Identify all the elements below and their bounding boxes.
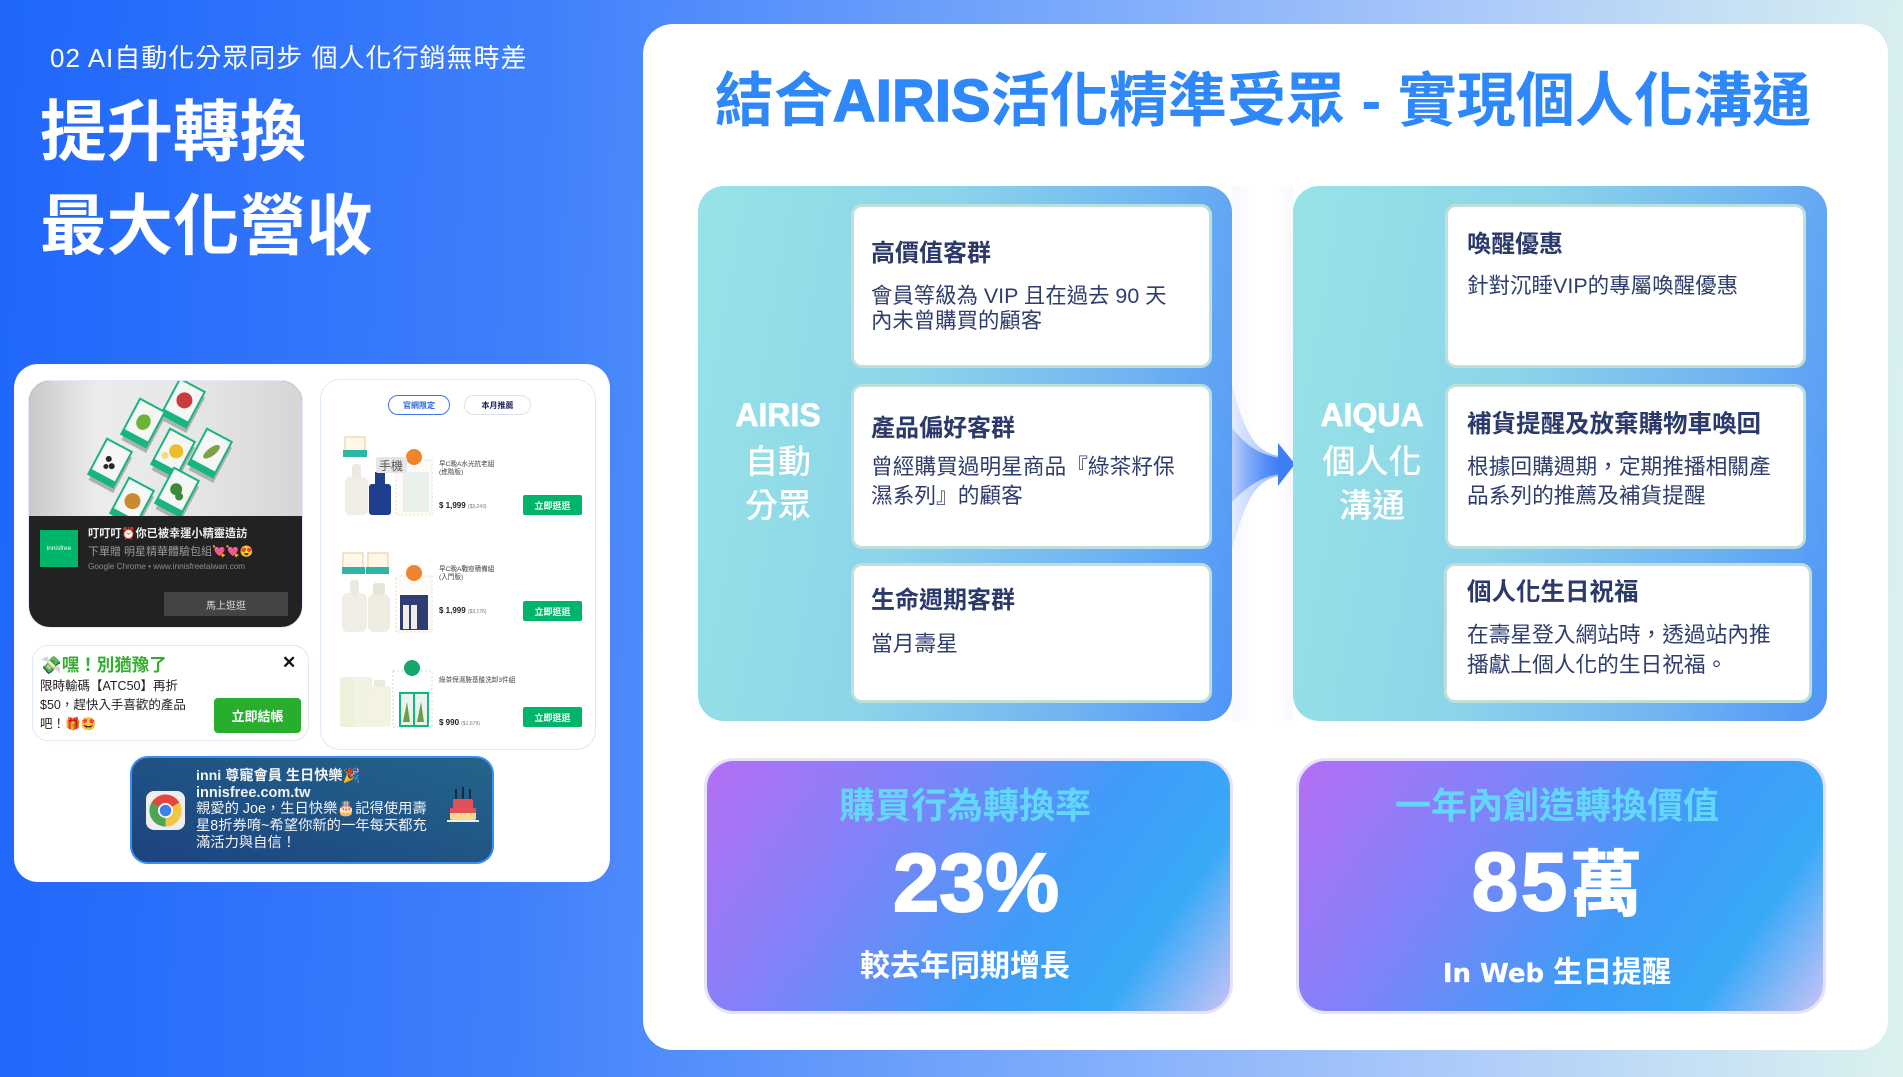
popup text: 限時輸碼【ATC50】再折 — [40, 679, 178, 693]
product 1 button — [523, 495, 582, 515]
product 2 button: 立即逛逛 — [534, 606, 570, 616]
text: 個人化生日祝福 — [1467, 622, 1771, 677]
text: 產品偏好客群 — [871, 454, 1175, 508]
text: 當月壽星: 當月壽星 — [871, 631, 958, 656]
panel: main content — [643, 24, 1888, 1050]
product 1 text: (進階版) — [439, 469, 463, 476]
AIQUA label: AIQUA — [1320, 397, 1424, 433]
product 2 text: 早C晚A戰痘積備組 — [439, 566, 494, 573]
heading: 生命週期客群: 生命週期客群 — [871, 587, 1015, 614]
notification title: inni 尊寵會員 生日快樂🎉 — [196, 768, 360, 784]
tab: 官網限定: 官網限定 — [403, 400, 435, 410]
text: 個人化生日祝福: 播獻上個人化的生日祝福。 — [1467, 652, 1727, 677]
text: 個人化生日祝福: 在壽星登入網站時，透過站內推 — [1467, 622, 1771, 647]
notification text: 星8折券唷~希望你新的一年每天都充 — [196, 818, 427, 834]
checkout button — [214, 698, 301, 733]
product 3 price: $ 990 ($1,679) — [439, 718, 480, 727]
heading: 產品偏好客群: 產品偏好客群 — [871, 415, 1015, 442]
分眾 label: 分眾 — [745, 487, 811, 524]
stat value: 23%: 23% — [893, 836, 1059, 929]
notification domain: innisfree.com.tw — [196, 785, 310, 801]
panel: AIRIS segmentation — [698, 186, 1232, 721]
text: 高價值客群: 內未曾購買的顧客 — [871, 309, 1042, 333]
birthday notification — [130, 756, 494, 864]
push source: Google Chrome • www.innisfreetaiwan.com — [88, 562, 245, 571]
product recommendation card — [320, 379, 596, 750]
subtitle: 02 AI自動化分眾同步 個人化行銷無時差 — [50, 43, 528, 73]
popup text — [40, 679, 186, 731]
product image 2 — [342, 552, 432, 632]
heading: 個人化生日祝福: 個人化生日祝福 — [1467, 579, 1638, 606]
product 1 text: 早C晚A水光抗老組 — [439, 461, 494, 468]
innisfree logo — [40, 530, 78, 567]
heading: 喚醒優惠: 喚醒優惠 — [1467, 231, 1563, 258]
notification text: 親愛的 Joe，生日快樂🎂記得使用壽 — [196, 801, 427, 817]
product 1 text — [439, 460, 494, 476]
push button: 馬上逛逛 — [206, 600, 246, 612]
card: 產品偏好客群 — [851, 384, 1212, 549]
stat value: 85萬: 85萬 — [1472, 835, 1642, 928]
in-web popup card — [32, 645, 309, 741]
text: 補貨提醒: 品系列的推薦及補貨提醒 — [1467, 483, 1706, 508]
panel: notification examples — [14, 364, 610, 882]
text: 高價值客群 — [871, 284, 1167, 333]
text: 產品偏好客群: 濕系列』的顧客 — [871, 483, 1023, 508]
product 2 text — [439, 565, 494, 581]
個人化 label: 個人化 — [1322, 443, 1422, 480]
tab: 本月推薦 — [464, 395, 531, 415]
card: 喚醒優惠 — [1445, 204, 1806, 368]
text: 喚醒優惠: 針對沉睡VIP的專屬喚醒優惠 — [1467, 274, 1738, 298]
溝通 label: 溝通 — [1339, 487, 1405, 524]
AIRIS label: AIRIS — [735, 397, 821, 433]
card: 生命週期客群 — [851, 563, 1212, 703]
card: 補貨提醒 — [1445, 384, 1806, 549]
tab: 本月推薦: 本月推薦 — [482, 400, 514, 410]
close icon: ✕ — [282, 653, 296, 672]
product 2 text: (入門版) — [439, 574, 463, 581]
popup text: 吧！🎁🤩 — [40, 717, 96, 731]
innisfree logo: innisfree — [47, 545, 71, 552]
notification text — [196, 800, 427, 851]
product 3 text: 綠茶保濕胺基酸洗卸3件組 — [439, 677, 515, 684]
checkout button: 立即結帳 — [231, 709, 284, 724]
product 2 price: $ 1,999 ($3,176) — [439, 606, 487, 615]
text: 補貨提醒: 根據回購週期，定期推播相關產 — [1467, 454, 1771, 479]
stat heading: 購買行為轉換率: 購買行為轉換率 — [839, 785, 1091, 826]
notification text: 滿活力與自信！ — [196, 835, 296, 851]
card: 高價值客群 — [851, 204, 1212, 368]
title: 結合AIRIS活化精準受眾 - 實現個人化溝通 — [715, 67, 1811, 134]
push button — [164, 592, 288, 616]
product image 3 — [340, 660, 432, 728]
heading: 高價值客群: 高價值客群 — [871, 240, 991, 267]
headline: 提升轉換: 提升轉換 — [40, 96, 306, 170]
popup heading: 💸嘿！別猶豫了 — [40, 655, 167, 675]
stat card: 購買行為轉換率 — [704, 758, 1233, 1014]
headline: 最大化營收: 最大化營收 — [40, 190, 372, 264]
arrow: segmentation to communication — [1232, 386, 1293, 549]
自動 label: 自動 — [745, 443, 811, 480]
push title: 叮叮叮⏰你已被幸運小精靈造訪 — [88, 528, 247, 540]
stat heading: 一年內創造轉換價值: 一年內創造轉換價值 — [1395, 785, 1719, 826]
chrome icon — [146, 791, 185, 830]
text: 補貨提醒 — [1467, 454, 1771, 508]
web push notification card — [28, 380, 303, 628]
text: 高價值客群: 會員等級為 VIP 且在過去 90 天 — [871, 284, 1167, 308]
push body: 下單贈 明星精華體驗包組💘💘😍 — [88, 546, 253, 558]
product 1 button: 立即逛逛 — [534, 500, 570, 510]
stat card: 一年內創造轉換價值 — [1296, 758, 1826, 1014]
text: 產品偏好客群: 曾經購買過明星商品『綠茶籽保 — [871, 454, 1175, 479]
product 1 price: $ 1,999 ($3,243) — [439, 501, 487, 510]
heading: 補貨提醒: 補貨提醒及放棄購物車喚回 — [1467, 411, 1761, 438]
product image 1 — [343, 436, 432, 516]
product 2 button — [523, 601, 582, 621]
product 3 button — [523, 707, 582, 727]
card: 個人化生日祝福 — [1444, 563, 1812, 703]
cake icon — [447, 787, 479, 822]
stat note: 較去年同期增長: 較去年同期增長 — [860, 950, 1070, 983]
product photo — [29, 381, 302, 516]
product image 1: 手機 — [379, 458, 403, 473]
panel: AIQUA communication — [1293, 186, 1827, 721]
tab: 官網限定 — [388, 395, 450, 415]
popup text: $50，趕快入手喜歡的產品 — [40, 698, 186, 712]
product 3 button: 立即逛逛 — [534, 712, 570, 722]
stat note: In Web 生日提醒: In Web 生日提醒 — [1443, 955, 1671, 989]
